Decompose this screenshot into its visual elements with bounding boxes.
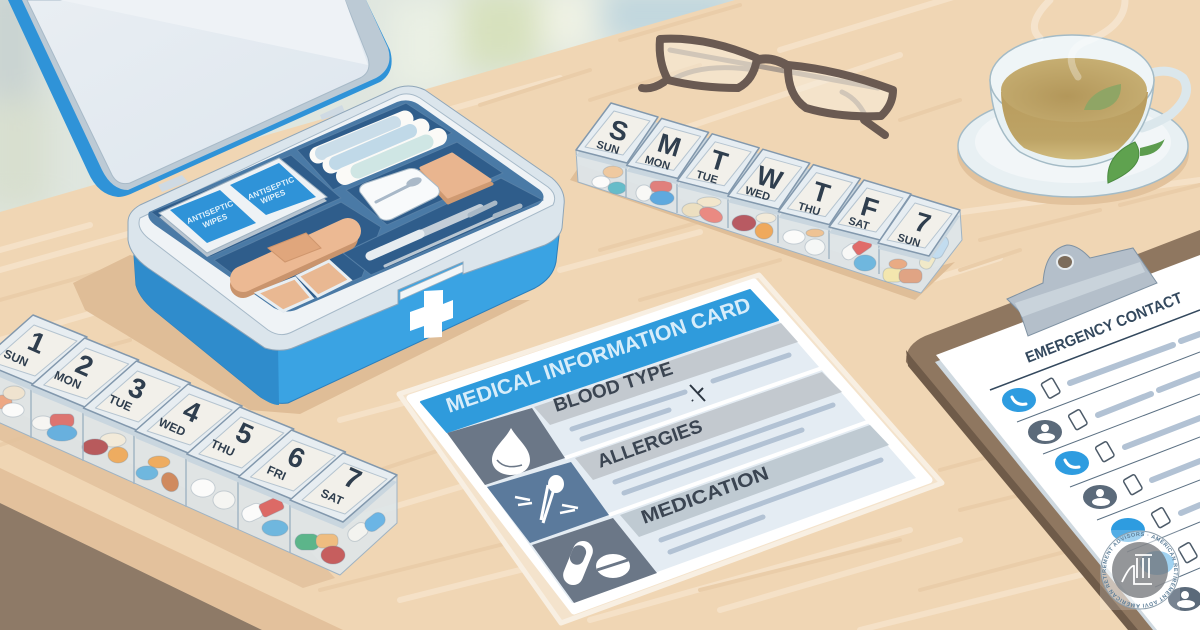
compartment lid: F SAT: SAT xyxy=(847,215,871,233)
card base xyxy=(410,282,929,611)
kit latch xyxy=(400,264,463,300)
row: blood type: BLOOD TYPE xyxy=(551,358,675,417)
compartment lid: T THU xyxy=(778,165,860,231)
kit tray xyxy=(148,100,544,312)
compartment lid: S SUN: S xyxy=(606,114,632,148)
cup rim xyxy=(990,35,1154,125)
compartment lid: T TUE: T xyxy=(707,144,732,178)
small white tin xyxy=(360,168,439,220)
compartment lid: 4 WED: 4 xyxy=(178,394,206,429)
antiseptic wipes: WIPES xyxy=(201,212,229,230)
emergency contact clipboard xyxy=(906,230,1200,630)
compartment lid: 7 SAT xyxy=(290,453,397,529)
row: allergies: ALLERGIES xyxy=(595,416,705,473)
compartment lid: 3 TUE: TUE xyxy=(107,392,134,414)
tea xyxy=(1001,92,1148,160)
compartment lid: 7 SUN xyxy=(878,195,960,262)
bridge xyxy=(757,59,788,66)
reading glasses xyxy=(642,39,893,135)
desk front edge and floor xyxy=(0,468,343,630)
compartment lid: 5 THU: THU xyxy=(209,437,237,459)
organizer shadow xyxy=(0,405,335,588)
right lens frame xyxy=(788,65,893,116)
antiseptic wipes xyxy=(159,158,327,257)
gauze pad xyxy=(419,154,492,203)
compartment lid: M MON: MON xyxy=(643,154,671,173)
kit shadow xyxy=(73,255,530,414)
compartment lid: S SUN xyxy=(576,103,658,169)
steam xyxy=(1034,0,1125,77)
contact row: person xyxy=(1028,409,1088,444)
antiseptic wipes: ANTISEPTIC xyxy=(246,175,296,202)
organizer pills xyxy=(0,386,388,564)
compartment lid: T THU: THU xyxy=(797,201,822,219)
pill organizer top-right xyxy=(570,103,962,300)
compartment lid: 1 SUN: 1 xyxy=(23,325,50,360)
row: blood type xyxy=(447,323,798,485)
compartment lid: 4 WED: WED xyxy=(156,415,188,439)
card body xyxy=(447,320,916,603)
compartment lid: 5 THU: 5 xyxy=(231,416,258,451)
contact row: person xyxy=(1168,587,1200,611)
cup body xyxy=(990,80,1154,167)
compartment lid: T THU: T xyxy=(809,176,834,209)
compartment lid: 7 SUN: SUN xyxy=(896,232,922,250)
compartment lid: 7 SAT: SAT xyxy=(319,486,346,508)
compartment dividers xyxy=(626,165,879,274)
antiseptic wipes: WIPES xyxy=(259,188,287,206)
compartment lid: 1 SUN: SUN xyxy=(2,346,30,370)
contact row: phone xyxy=(1111,507,1171,542)
compartment lid: F SAT: F xyxy=(857,191,882,225)
saucer xyxy=(958,95,1188,197)
card sleeve xyxy=(399,275,942,623)
pill organizer bottom-left xyxy=(0,315,397,588)
contact row: phone xyxy=(1055,441,1115,475)
row separators xyxy=(565,368,870,515)
row: medication: MEDICATION xyxy=(639,463,772,529)
compartment lid: 5 THU xyxy=(187,407,294,483)
compartment lid: M MON xyxy=(627,118,709,184)
kit blue body xyxy=(133,200,563,405)
compartment lid: 6 FRI: 6 xyxy=(283,440,310,475)
medical information card xyxy=(399,275,942,623)
left lens frame xyxy=(660,39,757,88)
compartment lid: 7 SAT: 7 xyxy=(339,461,366,496)
compartment lid: 2 MON xyxy=(32,338,139,414)
compartment lid: 7 SUN: 7 xyxy=(911,206,934,239)
compartment lid: 4 WED xyxy=(135,384,242,460)
compartment lid: 2 MON: MON xyxy=(52,368,83,392)
compartment lid: 6 FRI: FRI xyxy=(265,463,288,483)
gauze rolls xyxy=(318,119,438,176)
compartment lid: W WED: W xyxy=(753,160,787,196)
saucer shadow xyxy=(957,101,1189,205)
first aid kit xyxy=(8,0,564,414)
compartment lid: 6 FRI xyxy=(238,430,346,506)
clipboard board xyxy=(906,230,1200,630)
near temple tips xyxy=(642,82,885,135)
tea leaf xyxy=(1084,84,1121,110)
compartment dividers xyxy=(31,385,290,553)
compartment lid: W WED: WED xyxy=(743,185,772,204)
kit lid xyxy=(8,0,392,197)
adhesive bandages xyxy=(243,231,350,311)
organizer shadow xyxy=(570,165,955,300)
antiseptic wipes: ANTISEPTIC xyxy=(185,199,235,226)
compartment lid: S SUN: SUN xyxy=(595,139,621,157)
organizer body xyxy=(0,362,397,575)
compartment lid: M MON: M xyxy=(654,128,684,163)
contact row: phone xyxy=(1140,542,1198,575)
white cross xyxy=(410,290,453,338)
contact lines xyxy=(1070,334,1200,513)
far temple arms xyxy=(670,50,878,122)
organizer pills xyxy=(592,166,951,283)
paper xyxy=(935,255,1200,630)
compartment lid: 2 MON: 2 xyxy=(71,348,98,383)
compartment lid: 3 TUE xyxy=(83,361,190,437)
compartment lid: W WED xyxy=(728,149,810,215)
metal clip xyxy=(1007,245,1157,336)
compartment lid: 3 TUE: 3 xyxy=(124,371,151,406)
organizer body xyxy=(576,150,962,293)
compartment lid: F SAT xyxy=(829,180,911,246)
compartment lid: T TUE xyxy=(677,134,759,200)
clipboard title: EMERGENCY CONTACT xyxy=(1023,290,1185,367)
handle xyxy=(1142,71,1186,128)
watermark logo: American Retirement Advisors: AMERICAN RETIREMENT ADVISORS · AMERICAN RETIREMENT ADVISORS xyxy=(1102,532,1178,608)
title rule xyxy=(990,310,1200,587)
mint leaves xyxy=(1108,138,1165,183)
window background xyxy=(0,0,1200,230)
contact row: person xyxy=(1083,474,1143,509)
row: allergies xyxy=(487,372,842,543)
kit rim xyxy=(128,86,564,350)
row: medication xyxy=(532,425,889,603)
card header: MEDICAL INFORMATION CARD xyxy=(443,293,754,418)
tray compartments xyxy=(151,103,543,312)
tweezers xyxy=(370,203,520,266)
compartment lid: T TUE: TUE xyxy=(695,169,719,187)
contact row: phone xyxy=(1002,378,1061,412)
compartment lid: 1 SUN xyxy=(0,315,87,391)
cup of tea xyxy=(957,0,1189,205)
